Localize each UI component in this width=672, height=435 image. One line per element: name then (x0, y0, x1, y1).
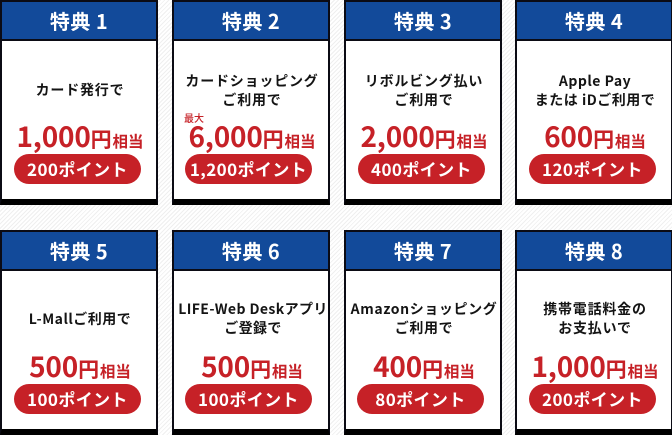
text: condition 7: Amazonショッピング (351, 299, 497, 319)
points pill: 400 (358, 154, 485, 184)
amount: 400 yen: 400円相当 (373, 346, 475, 386)
panel: benefit 4 (515, 0, 672, 205)
points pill: 80 (357, 384, 484, 414)
heading: benefit 2: 特典 2 (222, 6, 280, 35)
points pill: 100: 100ポイント (198, 386, 299, 411)
text: condition 7: ご利用で (395, 318, 453, 338)
text: condition 8: 携帯電話料金の (543, 299, 647, 319)
points pill: 100: 100ポイント (27, 386, 128, 411)
amount: 1,000 yen: 1,000円相当 (16, 116, 144, 156)
text: condition 3: リボルビング払い (365, 71, 483, 91)
heading: benefit 6: 特典 6 (222, 236, 280, 265)
heading: benefit 8: 特典 8 (565, 236, 623, 265)
text: condition 2 (185, 71, 319, 110)
panel: benefit 5 (0, 230, 158, 435)
panel: benefit 7 (344, 230, 502, 435)
text: condition 6: LIFE-Web Deskアプリ (178, 299, 328, 319)
amount: 6,000 yen: 6,000円相当 (188, 116, 316, 156)
amount: 2,000 yen: 2,000円相当 (360, 116, 488, 156)
points pill: 120: 120ポイント (542, 156, 643, 181)
heading: benefit 6 (174, 232, 328, 271)
heading: benefit 2 (174, 2, 328, 41)
text: condition 8: お支払いで (558, 318, 632, 338)
points pill: 100 (185, 384, 312, 414)
points pill: 400: 400ポイント (371, 156, 472, 181)
text: condition 2: ご利用で (222, 90, 282, 110)
heading: benefit 1 (2, 2, 156, 41)
text: condition 5: L-Mallご利用で (29, 308, 131, 328)
heading: benefit 7 (346, 232, 500, 271)
text: condition 7 (350, 299, 497, 338)
heading: benefit 5 (2, 232, 156, 271)
points pill: 80: 80ポイント (375, 386, 466, 411)
text: condition 6 (178, 299, 328, 338)
text: condition 4: Apple Pay (559, 71, 631, 91)
amount: 600 yen: 600円相当 (544, 116, 646, 156)
text: condition 3 (365, 71, 483, 110)
heading: benefit 7: 特典 7 (394, 236, 452, 265)
points pill: 200: 200ポイント (27, 156, 128, 181)
heading: benefit 5: 特典 5 (50, 236, 108, 265)
label: maximum: 最大 (184, 110, 204, 125)
heading: benefit 3: 特典 3 (394, 6, 452, 35)
points pill: 200 (14, 154, 141, 184)
heading: benefit 4 (517, 2, 671, 41)
amount: 500 yen: 500円相当 (201, 346, 303, 386)
text: condition 1: カード発行で (36, 80, 124, 100)
points pill: 1,200: 1,200ポイント (190, 156, 307, 181)
panel: benefit 2 (172, 0, 330, 205)
points pill: 200 (529, 384, 656, 414)
panel: benefit 6 (172, 230, 330, 435)
panel: benefit 3 (344, 0, 502, 205)
amount: 500 yen: 500円相当 (29, 346, 131, 386)
points pill: 200: 200ポイント (542, 386, 643, 411)
heading: benefit 8 (517, 232, 671, 271)
text: condition 6: ご登録で (224, 318, 282, 338)
panel: benefit 8 (515, 230, 672, 435)
heading: benefit 1: 特典 1 (50, 6, 108, 35)
points pill: 120 (529, 154, 656, 184)
panel: benefit 1 (0, 0, 158, 205)
text: condition 3: ご利用で (394, 90, 454, 110)
text: condition 4 (535, 71, 655, 110)
text: condition 2: カードショッピング (185, 71, 319, 91)
points pill: 100 (14, 384, 141, 414)
amount: 1,000 yen: 1,000円相当 (531, 346, 658, 386)
heading: benefit 4: 特典 4 (565, 6, 623, 35)
heading: benefit 3 (346, 2, 500, 41)
text: condition 8 (543, 299, 647, 338)
text: condition 4: または iDご利用で (535, 90, 655, 110)
